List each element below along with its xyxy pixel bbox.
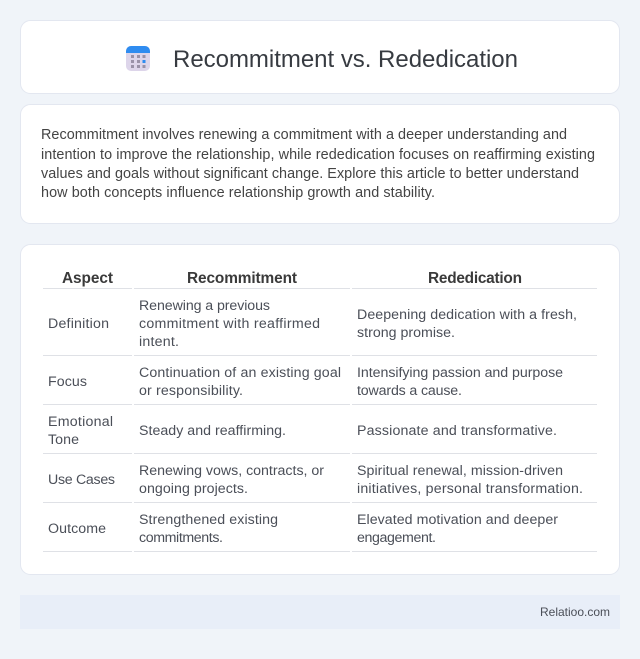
row: emotional tone: Tone (48, 432, 79, 448)
row: definition: Deepening dedication with a fresh, (357, 307, 577, 323)
footer text: Relatioo.com (540, 605, 610, 619)
row: use cases: Spiritual renewal, mission-driven (357, 463, 563, 479)
row: outcome: Strengthened existing (139, 512, 278, 528)
row: focus: Continuation of an existing goal (139, 365, 341, 381)
row: outcome: Elevated motivation and deeper (357, 512, 558, 528)
row: definition: intent. (139, 334, 179, 350)
row: definition (48, 298, 577, 350)
row: use cases: Use Cases (48, 472, 115, 488)
row: outcome (48, 512, 558, 546)
panel: comparison table (20, 244, 620, 574)
table header (62, 270, 522, 287)
row: outcome: Outcome (48, 521, 106, 537)
row: use cases (48, 463, 583, 497)
table header: Rededication (428, 270, 522, 287)
row: focus (48, 365, 563, 399)
row: use cases: initiatives, personal transformation. (357, 481, 583, 497)
row: focus: towards a cause. (357, 383, 462, 399)
row: definition: strong promise. (357, 325, 455, 341)
panel: introduction (20, 104, 620, 224)
table header: Aspect (62, 270, 113, 287)
intro text: intention to improve the relationship, while rededication focuses on reaffirming existing (41, 147, 595, 163)
row: use cases: ongoing projects. (139, 481, 248, 497)
row: focus: or responsibility. (139, 383, 243, 399)
row: emotional tone (48, 414, 557, 448)
row: emotional tone: Steady and reaffirming. (139, 423, 286, 439)
row: focus: Intensifying passion and purpose (357, 365, 563, 381)
icon: calendar (126, 46, 150, 71)
row: definition: commitment with reaffirmed (139, 316, 320, 332)
row: definition: Renewing a previous (139, 298, 270, 314)
intro text: how both concepts influence relationship growth and stability. (41, 185, 435, 201)
footer (20, 595, 620, 629)
table header: Recommitment (187, 270, 297, 287)
title card (20, 20, 620, 94)
intro text: values and goals without significant change. Explore this article to better understand (41, 166, 579, 182)
row: use cases: Renewing vows, contracts, or (139, 463, 324, 479)
row: emotional tone: Passionate and transformative. (357, 423, 557, 439)
row: emotional tone: Emotional (48, 414, 113, 430)
intro text (41, 127, 595, 201)
row: focus: Focus (48, 374, 87, 390)
intro text: Recommitment involves renewing a commitment with a deeper understanding and (41, 127, 567, 143)
row: outcome: commitments. (139, 530, 223, 546)
row: outcome: engagement. (357, 530, 436, 546)
row: definition: Definition (48, 316, 109, 332)
title: Recommitment vs. Rededication (173, 46, 518, 73)
